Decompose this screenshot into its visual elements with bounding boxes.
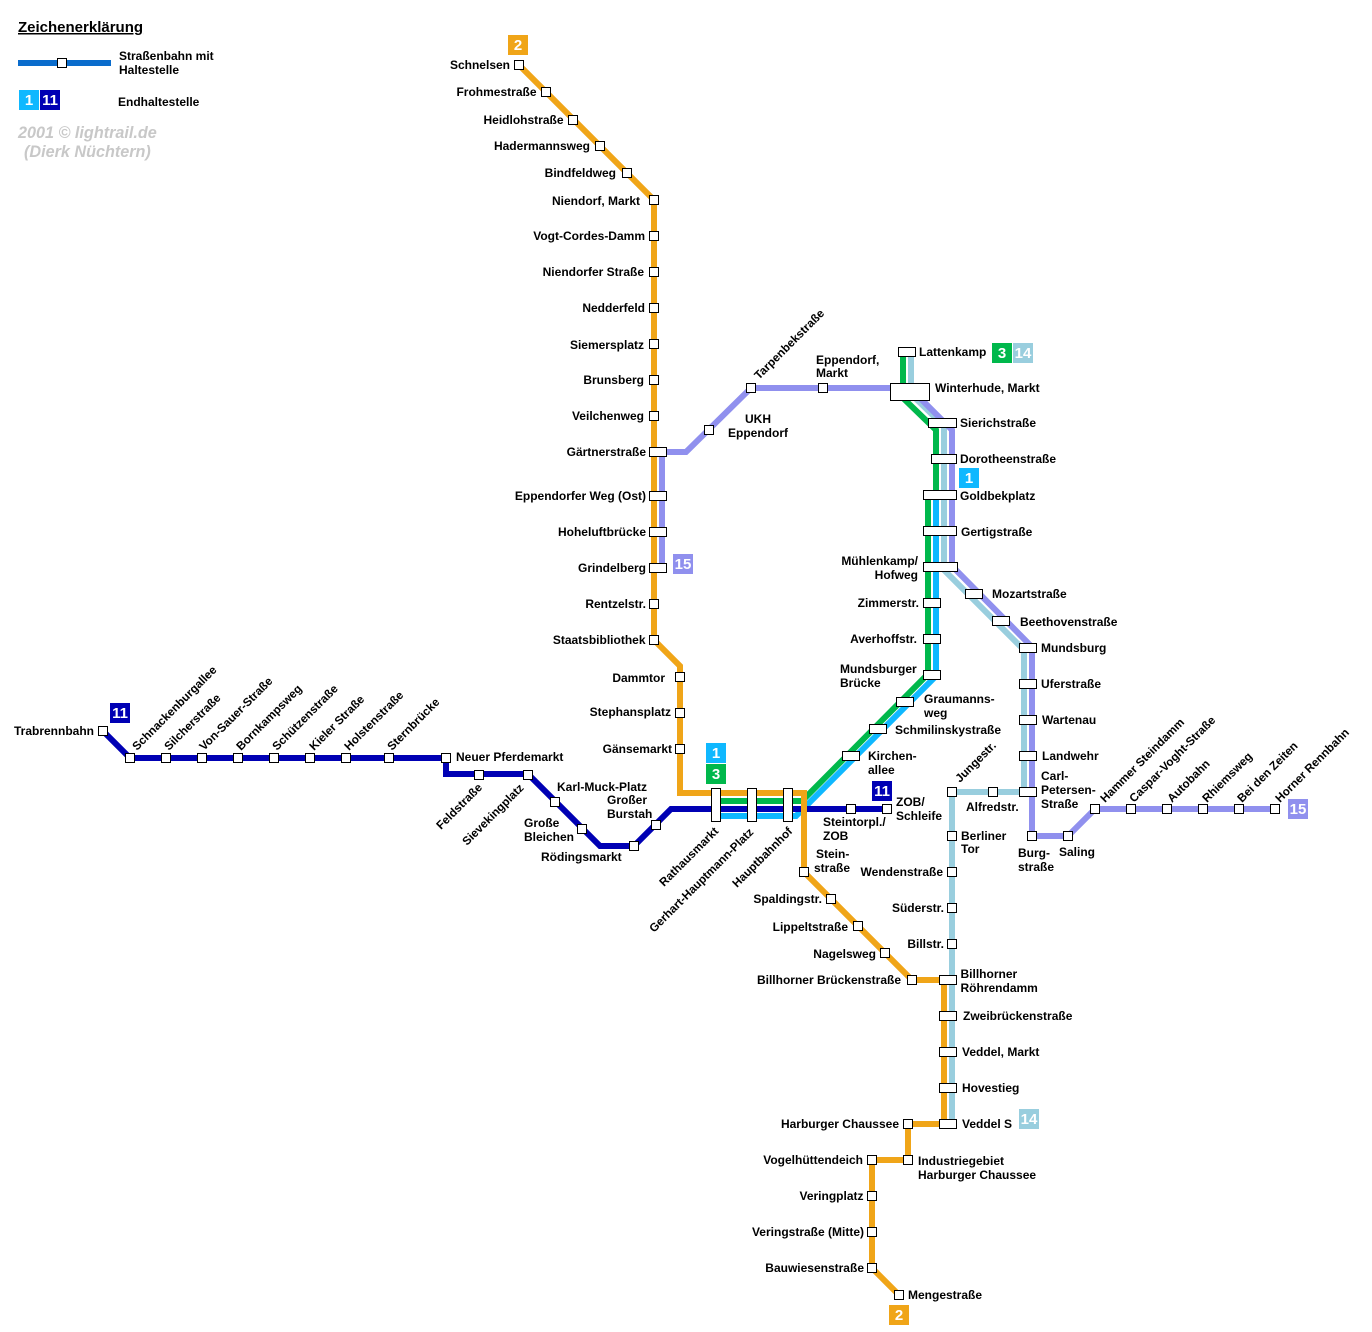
station: Große Bleichen: Große — [524, 816, 560, 830]
station: Veringplatz: Veringplatz — [799, 1189, 864, 1203]
station: Mundsburg: Mundsburg — [1041, 641, 1106, 655]
station: Hovestieg: Hovestieg — [962, 1081, 1019, 1095]
station: Burgstraße — [1018, 832, 1054, 874]
station: Berliner Tor — [948, 829, 1007, 856]
station: Grindelberg: Grindelberg — [578, 561, 646, 575]
station: Berliner Tor: Tor — [961, 842, 980, 856]
station: Große Bleichen: Bleichen — [524, 830, 574, 844]
station: UKH Eppendorf — [704, 412, 789, 440]
station: Süderstr.: Süderstr. — [892, 901, 944, 915]
station: Gertigstraße — [924, 525, 1033, 539]
station: Vogelhüttendeich: Vogelhüttendeich — [763, 1153, 863, 1167]
station: Caspar-Voght-Straße: Caspar-Voght-Straße — [1127, 714, 1219, 805]
station: Sievekingplatz: Sievekingplatz — [460, 781, 527, 848]
station: Eppendorf, Markt: Eppendorf, — [816, 353, 879, 367]
station: Goldbekplatz: Goldbekplatz — [960, 489, 1035, 503]
station: Holstenstraße: Holstenstraße — [342, 688, 407, 753]
station: Eppendorf, Markt — [816, 353, 879, 392]
station: Kirchenallee: Kirchen- — [868, 749, 917, 763]
station: Bei den Zeiten: Bei den Zeiten — [1235, 739, 1301, 805]
station: Steinstraße: Stein- — [816, 847, 849, 861]
station: Alfredstr.: Alfredstr. — [966, 800, 1019, 814]
station: Zimmerstr.: Zimmerstr. — [858, 596, 919, 610]
station: Hadermannsweg: Hadermannsweg — [494, 139, 590, 153]
station: Großer Burstah: Burstah — [607, 807, 652, 821]
station: Berliner Tor: Berliner — [961, 829, 1007, 843]
station: Schnelsen: Schnelsen — [450, 58, 510, 72]
station: Rödingsmarkt — [541, 842, 638, 864]
legend: tram line with stop: Straßenbahn mit — [119, 49, 214, 63]
station: Karl-Muck-Platz — [550, 780, 647, 806]
station: Lattenkamp: Lattenkamp — [919, 345, 986, 359]
station: UKH Eppendorf: UKH — [745, 412, 771, 426]
badge: line 11 Trabrennbahn: 11 — [112, 705, 128, 722]
station: Carl-Petersen-Straße: Petersen- — [1041, 783, 1096, 797]
station: Carl-Petersen-Straße: Carl- — [1041, 769, 1068, 783]
station: Goldbekplatz — [924, 489, 1035, 503]
station: Harburger Chaussee: Harburger Chaussee — [781, 1117, 899, 1131]
station: Mengestraße: Mengestraße — [908, 1288, 982, 1302]
station: Billhorner Röhrendamm: Röhrendamm — [960, 981, 1038, 995]
station: Frohmestraße: Frohmestraße — [456, 85, 537, 99]
badge: line 3 centre: 3 — [712, 766, 720, 783]
badge: line 3 centre — [706, 764, 726, 784]
station: Dorotheenstraße: Dorotheenstraße — [960, 452, 1056, 466]
line 1 — [716, 495, 936, 816]
station: Große Bleichen — [524, 816, 586, 844]
copyright note: (Dierk Nüchtern) — [24, 143, 151, 161]
station: Dammtor: Dammtor — [612, 671, 665, 685]
badge: line 11 ZOB — [872, 781, 892, 801]
legend heading: Zeichenerklärung — [18, 19, 143, 36]
station: Mozartstraße: Mozartstraße — [992, 587, 1067, 601]
badge: line 2 north — [508, 35, 528, 55]
station: Niendorfer Straße: Niendorfer Straße — [543, 265, 644, 279]
badge: line 11 Trabrennbahn — [110, 703, 130, 723]
station: Beethovenstraße: Beethovenstraße — [1020, 615, 1118, 629]
station: Nedderfeld: Nedderfeld — [582, 301, 645, 315]
station: Zweibrückenstraße: Zweibrückenstraße — [963, 1009, 1073, 1023]
station: Silcherstraße: Silcherstraße — [162, 691, 224, 753]
station: Steinstraße: straße — [814, 861, 850, 875]
station: Lippeltstraße: Lippeltstraße — [773, 920, 848, 934]
station: Eppendorfer Weg (Ost): Eppendorfer Weg (Ost) — [515, 489, 646, 503]
station: Steintorpl./ZOB: ZOB — [823, 829, 849, 843]
station: Burgstraße: Burg- — [1018, 846, 1050, 860]
station: Hauptbahnhof — [730, 788, 795, 890]
station: Veringstraße (Mitte): Veringstraße (Mitte) — [752, 1225, 864, 1239]
station: Kieler Straße: Kieler Straße — [307, 693, 367, 753]
station: Brunsberg: Brunsberg — [583, 373, 644, 387]
station: Industriegebiet Harburger Chaussee: Harburger Chaussee — [918, 1168, 1036, 1182]
station: Vogt-Cordes-Damm: Vogt-Cordes-Damm — [533, 229, 645, 243]
station: Steintorpl./ZOB — [823, 804, 886, 843]
badge: line 15 Grindelberg: 15 — [675, 556, 691, 573]
station: Billhorner Brückenstraße: Billhorner Brückenstraße — [757, 973, 901, 987]
station: Industriegebiet Harburger Chaussee: Industriegebiet — [918, 1154, 1004, 1168]
legend: tram line with stop — [18, 49, 214, 77]
station: Großer Burstah: Großer — [607, 793, 647, 807]
station: Siemersplatz: Siemersplatz — [570, 338, 644, 352]
line 3 — [716, 352, 936, 801]
station: UKH Eppendorf: Eppendorf — [728, 426, 789, 440]
station: Gertigstraße: Gertigstraße — [961, 525, 1033, 539]
legend: terminus badges: 11 — [42, 92, 58, 109]
station: Winterhude, Markt: Winterhude, Markt — [935, 381, 1040, 395]
station: Heidlohstraße: Heidlohstraße — [483, 113, 564, 127]
station: Großer Burstah — [607, 793, 660, 830]
station: Staatsbibliothek: Staatsbibliothek — [553, 633, 646, 647]
station: Trabrennbahn: Trabrennbahn — [14, 724, 94, 738]
line 2 — [519, 65, 944, 1295]
station: Saling: Saling — [1059, 845, 1095, 859]
station: ZOB/Schleife — [882, 795, 942, 823]
station: Autobahn: Autobahn — [1165, 757, 1213, 805]
line 15 — [662, 388, 1275, 836]
station: Horner Rennbahn: Horner Rennbahn — [1273, 726, 1352, 805]
station: Carl-Petersen-Straße — [1020, 769, 1096, 811]
badge: line 3 Lattenkamp — [992, 343, 1012, 363]
station: Burgstraße: straße — [1018, 860, 1054, 874]
copyright note — [17, 124, 157, 161]
badge: line 1 centre — [706, 743, 726, 763]
station: Rathausmarkt: Rathausmarkt — [657, 825, 721, 889]
station: Feldstraße: Feldstraße — [434, 781, 485, 832]
station: Wartenau: Wartenau — [1042, 713, 1096, 727]
station: Karl-Muck-Platz: Karl-Muck-Platz — [557, 780, 647, 794]
station: Gärtnerstraße: Gärtnerstraße — [567, 445, 646, 459]
station: Kirchenallee — [842, 749, 917, 777]
station: Mundsburger Brücke: Brücke — [840, 676, 881, 690]
station: Hoheluftbrücke: Hoheluftbrücke — [558, 525, 646, 539]
station: Graumannsweg: Graumanns- — [924, 692, 995, 706]
badge: line 3 Lattenkamp: 3 — [998, 345, 1006, 362]
station: Niendorf, Markt: Niendorf, Markt — [552, 194, 640, 208]
station: Rathausmarkt — [657, 788, 721, 889]
station: Bauwiesenstraße: Bauwiesenstraße — [765, 1261, 864, 1275]
station: Schnackenburgallee: Schnackenburgallee — [130, 663, 220, 753]
station: Graumannsweg: weg — [923, 706, 947, 720]
station: Graumannsweg — [896, 692, 995, 720]
station: Spaldingstr.: Spaldingstr. — [753, 892, 822, 906]
station: Uferstraße: Uferstraße — [1041, 677, 1101, 691]
station: Carl-Petersen-Straße: Straße — [1041, 797, 1079, 811]
station: Neuer Pferdemarkt: Neuer Pferdemarkt — [456, 750, 563, 764]
station: Gerhart-Hauptmann-Platz: Gerhart-Hauptmann-Platz — [647, 826, 756, 935]
station: Saling — [1059, 832, 1095, 859]
copyright note: 2001 © lightrail.de — [17, 124, 157, 142]
station: Bindfeldweg: Bindfeldweg — [545, 166, 616, 180]
legend: terminus badges: Endhaltestelle — [118, 95, 200, 109]
station: Steintorpl./ZOB: Steintorpl./ — [823, 815, 886, 829]
station: Sternbrücke: Sternbrücke — [385, 695, 443, 753]
line 14 — [911, 352, 1024, 1124]
station: Mundsburger Brücke — [840, 662, 940, 690]
badge: line 1 centre: 1 — [712, 745, 720, 762]
station: Billhorner Röhrendamm — [940, 967, 1038, 995]
badge: line 2 south: 2 — [895, 1307, 903, 1324]
station: Veddel S: Veddel S — [962, 1117, 1012, 1131]
line 11 — [103, 731, 887, 846]
station: Eppendorf, Markt: Markt — [816, 366, 848, 380]
badge: line 2 north: 2 — [514, 37, 522, 54]
station: Schützenstraße: Schützenstraße — [270, 682, 341, 753]
station: Sierichstraße: Sierichstraße — [960, 416, 1036, 430]
station: Veilchenweg: Veilchenweg — [572, 409, 644, 423]
station: Veddel S — [940, 1117, 1012, 1131]
station: Mühlenkamp/Hofweg: Mühlenkamp/ — [841, 554, 919, 568]
station: Gänsemarkt: Gänsemarkt — [603, 742, 672, 756]
station: ZOB/Schleife: Schleife — [896, 809, 942, 823]
badge: line 11 ZOB: 11 — [874, 783, 890, 800]
station: Alfredstr. — [966, 788, 1019, 814]
station: Rhiemsweg: Rhiemsweg — [1200, 750, 1255, 805]
station: Rentzelstr.: Rentzelstr. — [585, 597, 646, 611]
legend — [17, 19, 214, 161]
station: Rödingsmarkt: Rödingsmarkt — [541, 850, 622, 864]
station: Wendenstraße: Wendenstraße — [861, 865, 943, 879]
station: Nagelsweg: Nagelsweg — [813, 947, 876, 961]
station: Jungestr.: Jungestr. — [953, 739, 999, 785]
legend: terminus badges — [19, 90, 200, 110]
station: Stephansplatz: Stephansplatz — [590, 705, 671, 719]
station: Tarpenbekstraße: Tarpenbekstraße — [752, 307, 827, 382]
station: Billstr.: Billstr. — [907, 937, 944, 951]
legend: tram line with stop: Haltestelle — [119, 63, 179, 77]
station: Mühlenkamp/Hofweg — [841, 554, 958, 582]
station: Bornkampsweg: Bornkampsweg — [234, 682, 305, 753]
badge: line 1 Goldbekplatz: 1 — [965, 470, 973, 487]
badge: line 15 Horner Rennbahn: 15 — [1290, 801, 1306, 818]
station: ZOB/Schleife: ZOB/ — [896, 795, 925, 809]
station: Schmilinskystraße: Schmilinskystraße — [895, 723, 1001, 737]
station: Landwehr: Landwehr — [1042, 749, 1099, 763]
station: Mühlenkamp/Hofweg: Hofweg — [875, 568, 918, 582]
station: Industriegebiet Harburger Chaussee — [904, 1154, 1036, 1182]
badge: line 2 south — [889, 1305, 909, 1325]
legend: terminus badges: 1 — [25, 92, 33, 109]
station: Winterhude, Markt — [890, 381, 1040, 400]
badge: line 14 Veddel: 14 — [1021, 1111, 1038, 1128]
badge: line 14 Lattenkamp: 14 — [1015, 345, 1032, 362]
badge: line 1 Goldbekplatz — [959, 468, 979, 488]
station: Averhoffstr.: Averhoffstr. — [850, 632, 917, 646]
station: Billhorner Röhrendamm: Billhorner — [960, 967, 1018, 981]
station: Von-Sauer-Straße: Von-Sauer-Straße — [197, 674, 276, 753]
station: Hauptbahnhof: Hauptbahnhof — [730, 825, 795, 890]
station: Veddel, Markt: Veddel, Markt — [962, 1045, 1039, 1059]
station: Kirchenallee: allee — [868, 763, 895, 777]
station: Mundsburger Brücke: Mundsburger — [840, 662, 917, 676]
station: Hammer Steindamm: Hammer Steindamm — [1098, 716, 1187, 805]
station: Steinstraße — [800, 847, 850, 876]
